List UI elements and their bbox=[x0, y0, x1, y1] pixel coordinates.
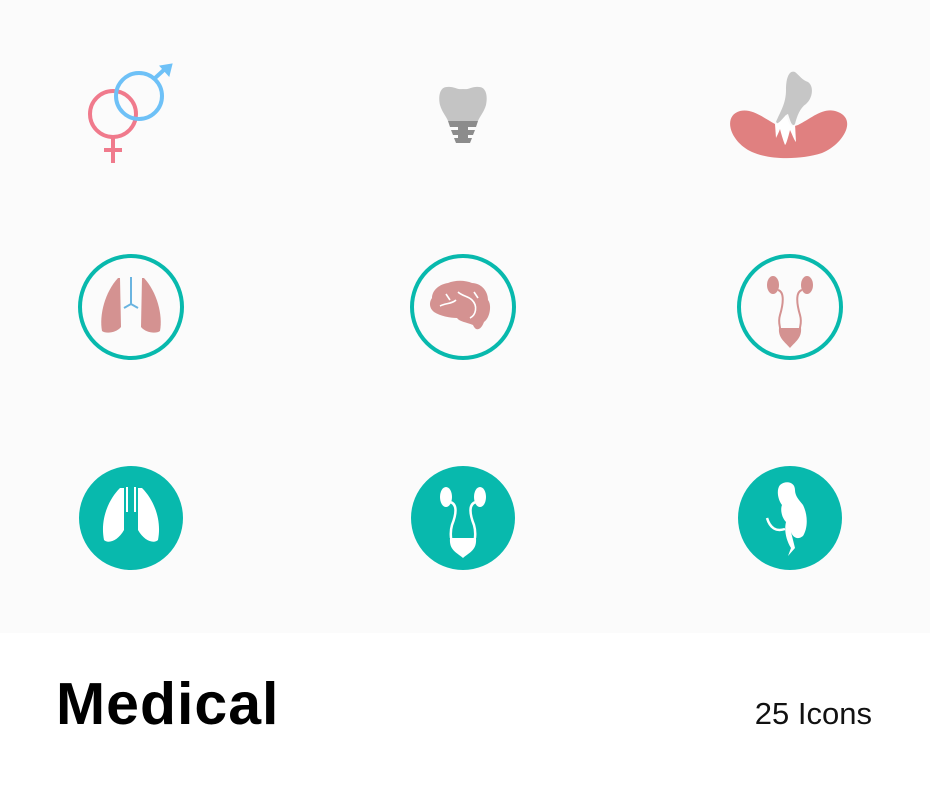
icon: brain outline circle bbox=[412, 256, 514, 358]
icon: kidneys outline circle bbox=[739, 256, 841, 358]
icon: lungs outline circle bbox=[80, 256, 182, 358]
icon: gender symbols bbox=[90, 64, 172, 163]
icon: lungs filled circle bbox=[79, 466, 183, 570]
icon: dental implant bbox=[439, 87, 487, 143]
icon: kidneys filled circle bbox=[411, 466, 515, 570]
title: Medical bbox=[56, 671, 279, 737]
icon: tooth extraction bbox=[730, 72, 847, 158]
icon: fetus filled circle bbox=[738, 466, 842, 570]
icon count: 25 Icons bbox=[755, 696, 872, 731]
